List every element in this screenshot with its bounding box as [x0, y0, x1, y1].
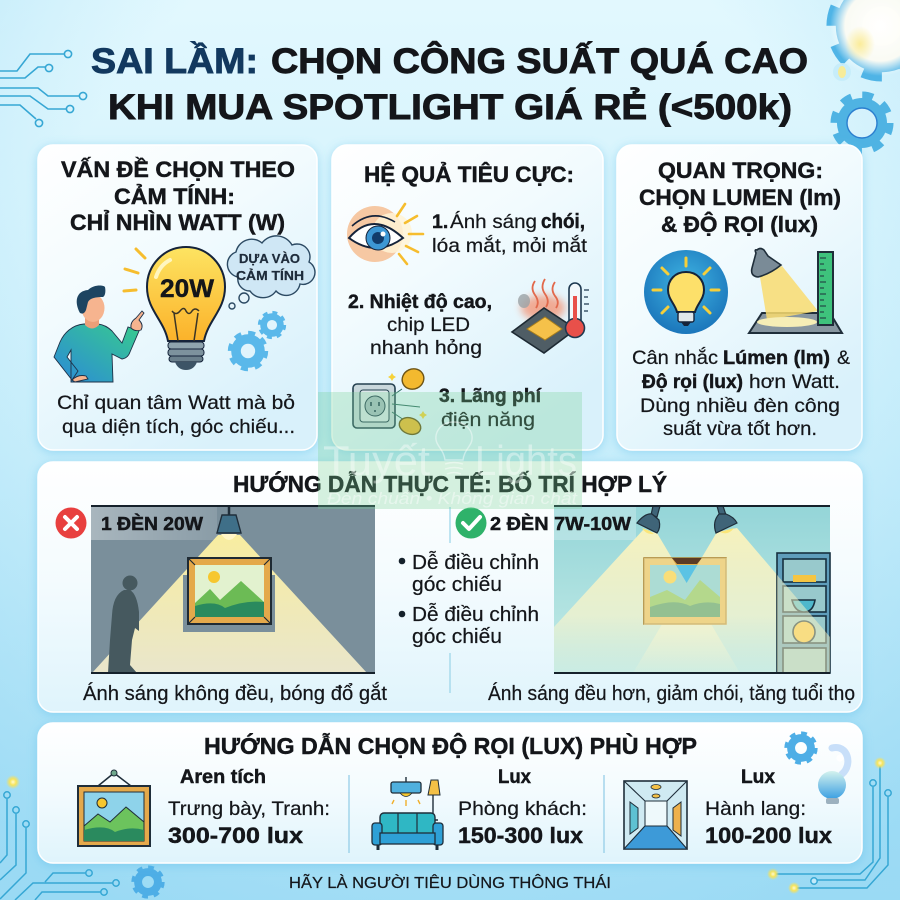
text: glare — [432, 210, 588, 257]
icon: spotlight and lux ruler — [749, 248, 842, 333]
icon: 20W bulb — [147, 247, 225, 370]
icon: 20W bulb: 20W — [160, 275, 214, 303]
title: SAI LẦM: — [91, 41, 258, 81]
caption: one lamp: Ánh sáng không đều, bóng đổ gắt — [83, 682, 387, 705]
icon: person pointing — [54, 285, 144, 382]
caption: problem — [57, 392, 295, 438]
title: KHI MUA SPOTLIGHT GIÁ RẺ (<500k) — [108, 87, 792, 127]
text: corridor lux: Hành lang: — [705, 798, 806, 820]
title: CHỌN CÔNG SUẤT QUÁ CAO — [271, 41, 808, 81]
text: living room lux — [458, 767, 587, 848]
panel: lumen and lux — [617, 145, 862, 450]
pendant lamp — [217, 506, 241, 540]
heading: problem — [61, 157, 295, 235]
heading: lumen and lux: & ĐỘ RỌI (lux) — [661, 212, 818, 237]
icon: glowing bulb — [818, 747, 848, 804]
icon: wall socket with coins — [353, 365, 427, 437]
spot lamps — [637, 506, 737, 533]
text: lumen advice: & — [837, 347, 850, 369]
divider — [449, 507, 451, 693]
text: living room lux: Lux — [498, 767, 531, 788]
bullet list: góc chiếu — [412, 574, 502, 596]
text: wasted power: 3. Lãng phí — [439, 385, 542, 407]
text: lumen advice: suất vừa tốt hơn. — [663, 418, 817, 440]
circuit decoration bottom left — [0, 792, 119, 900]
heading: lux guide: HƯỚNG DẪN CHỌN ĐỘ RỌI (LUX) PHÙ HỢP — [204, 731, 697, 759]
text: lumen advice: Lúmen (lm) — [723, 347, 830, 369]
heading: practical guide: HƯỚNG DẪN THỰC TẾ: BỐ TRÍ HỢP LÝ — [233, 469, 667, 497]
text: display lux: Trưng bày, Tranh: — [168, 798, 330, 820]
bullet list: Dễ điều chỉnh — [412, 603, 539, 626]
icon: rays — [124, 249, 145, 291]
text: display lux: Aren tích — [180, 767, 266, 788]
panel: lux guide — [38, 723, 862, 863]
text: glare: chói, — [541, 211, 585, 233]
callout: thought cloud: DỰA VÀO — [239, 251, 300, 266]
panel: practical guide — [38, 462, 862, 712]
text: living room lux: 150-300 lux — [458, 823, 584, 848]
gear bottom left — [133, 867, 163, 897]
lamp glow — [642, 528, 734, 534]
text: wasted power: điện năng — [441, 409, 535, 431]
heading: lumen and lux: QUAN TRỌNG: — [658, 158, 823, 183]
watermark: Lights — [475, 437, 577, 484]
caption: two lamps: Ánh sáng đều hơn, giảm chói, tăng tuổi thọ — [488, 682, 855, 705]
bullet list: Dễ điều chỉnh — [412, 551, 539, 574]
text: wasted power — [439, 385, 542, 431]
divider — [349, 775, 604, 853]
heading: lumen and lux — [639, 158, 841, 237]
title — [91, 41, 808, 127]
panel: watt problem — [38, 145, 317, 450]
label: two lamps: 2 ĐÈN 7W-10W — [490, 513, 631, 534]
icon: red cross — [56, 508, 86, 538]
picture frame — [644, 558, 726, 624]
shelf unit — [777, 553, 830, 673]
picture frame — [188, 558, 271, 624]
gear top right — [834, 95, 890, 151]
text: heat: chip LED — [387, 314, 470, 336]
bullet list: góc chiếu — [412, 626, 502, 648]
text: lumen advice: Dùng nhiều đèn công — [640, 395, 840, 417]
caption: problem: qua diện tích, góc chiếu... — [62, 416, 295, 438]
scene: two smaller lamps — [554, 506, 830, 673]
text: corridor lux — [705, 767, 833, 848]
heading: lumen and lux: CHỌN LUMEN (lm) — [639, 185, 841, 210]
icon: sofa with lamp — [372, 777, 443, 850]
text: lumen advice — [632, 346, 850, 440]
bullet list — [399, 551, 539, 648]
scene: one 20W lamp — [91, 506, 375, 673]
silhouette of viewer — [108, 576, 139, 673]
text: lumen advice: hơn Watt. — [749, 371, 840, 393]
icon: hot LED chip with thermometer — [512, 279, 589, 353]
text: heat: nhanh hỏng — [370, 337, 482, 359]
watermark — [318, 392, 582, 509]
icon: gears — [230, 313, 284, 369]
text: glare: 1. — [432, 211, 448, 233]
footer tagline: HÃY LÀ NGƯỜI TIÊU DÙNG THÔNG THÁI — [289, 872, 611, 892]
label: one lamp: 1 ĐÈN 20W — [101, 513, 203, 534]
icon: eye with glare — [347, 204, 423, 264]
panel: consequences — [332, 145, 603, 450]
circuit decoration top left — [0, 50, 87, 127]
callout: thought cloud: CẢM TÍNH — [236, 268, 304, 283]
watermark: Tuyết — [323, 437, 430, 484]
text: lumen advice: Độ rọi (lux) — [642, 371, 743, 393]
text: corridor lux: Lux — [741, 767, 775, 788]
heading: consequences: HỆ QUẢ TIÊU CỰC: — [364, 162, 574, 187]
icon: bulb on blue disc — [644, 250, 728, 334]
heading: problem: CHỈ NHÌN WATT (W) — [70, 210, 285, 235]
icon: corridor — [624, 781, 687, 849]
text: display lux: 300-700 lux — [168, 823, 304, 848]
light beams behind objects — [554, 528, 830, 673]
text: lumen advice: Cân nhắc — [632, 346, 718, 369]
text: glare: lóa mắt, mỏi mắt — [432, 234, 588, 257]
circuit decoration bottom right — [767, 757, 891, 894]
gear and glowing light top right — [830, 0, 900, 81]
text: glare: Ánh sáng — [450, 210, 537, 233]
light wash over frame and shelf — [644, 558, 830, 672]
text: heat: 2. Nhiệt độ cao, — [348, 291, 492, 313]
callout: thought cloud — [227, 236, 315, 309]
caption: problem: Chỉ quan tâm Watt mà bỏ — [57, 392, 295, 414]
text: living room lux: Phòng khách: — [458, 798, 587, 820]
watermark: Đèn chuẩn • Không gian chất — [327, 489, 578, 508]
glow dot bottom left — [6, 775, 20, 789]
heading: problem: VẤN ĐỀ CHỌN THEO — [61, 157, 295, 182]
text: heat — [348, 291, 492, 359]
icon: framed painting — [78, 770, 150, 846]
heading: problem: CẢM TÍNH: — [114, 184, 235, 209]
text: display lux — [168, 767, 330, 848]
decorative gear icon — [786, 733, 816, 763]
icon: green check — [456, 508, 486, 538]
text: corridor lux: 100-200 lux — [705, 823, 833, 848]
